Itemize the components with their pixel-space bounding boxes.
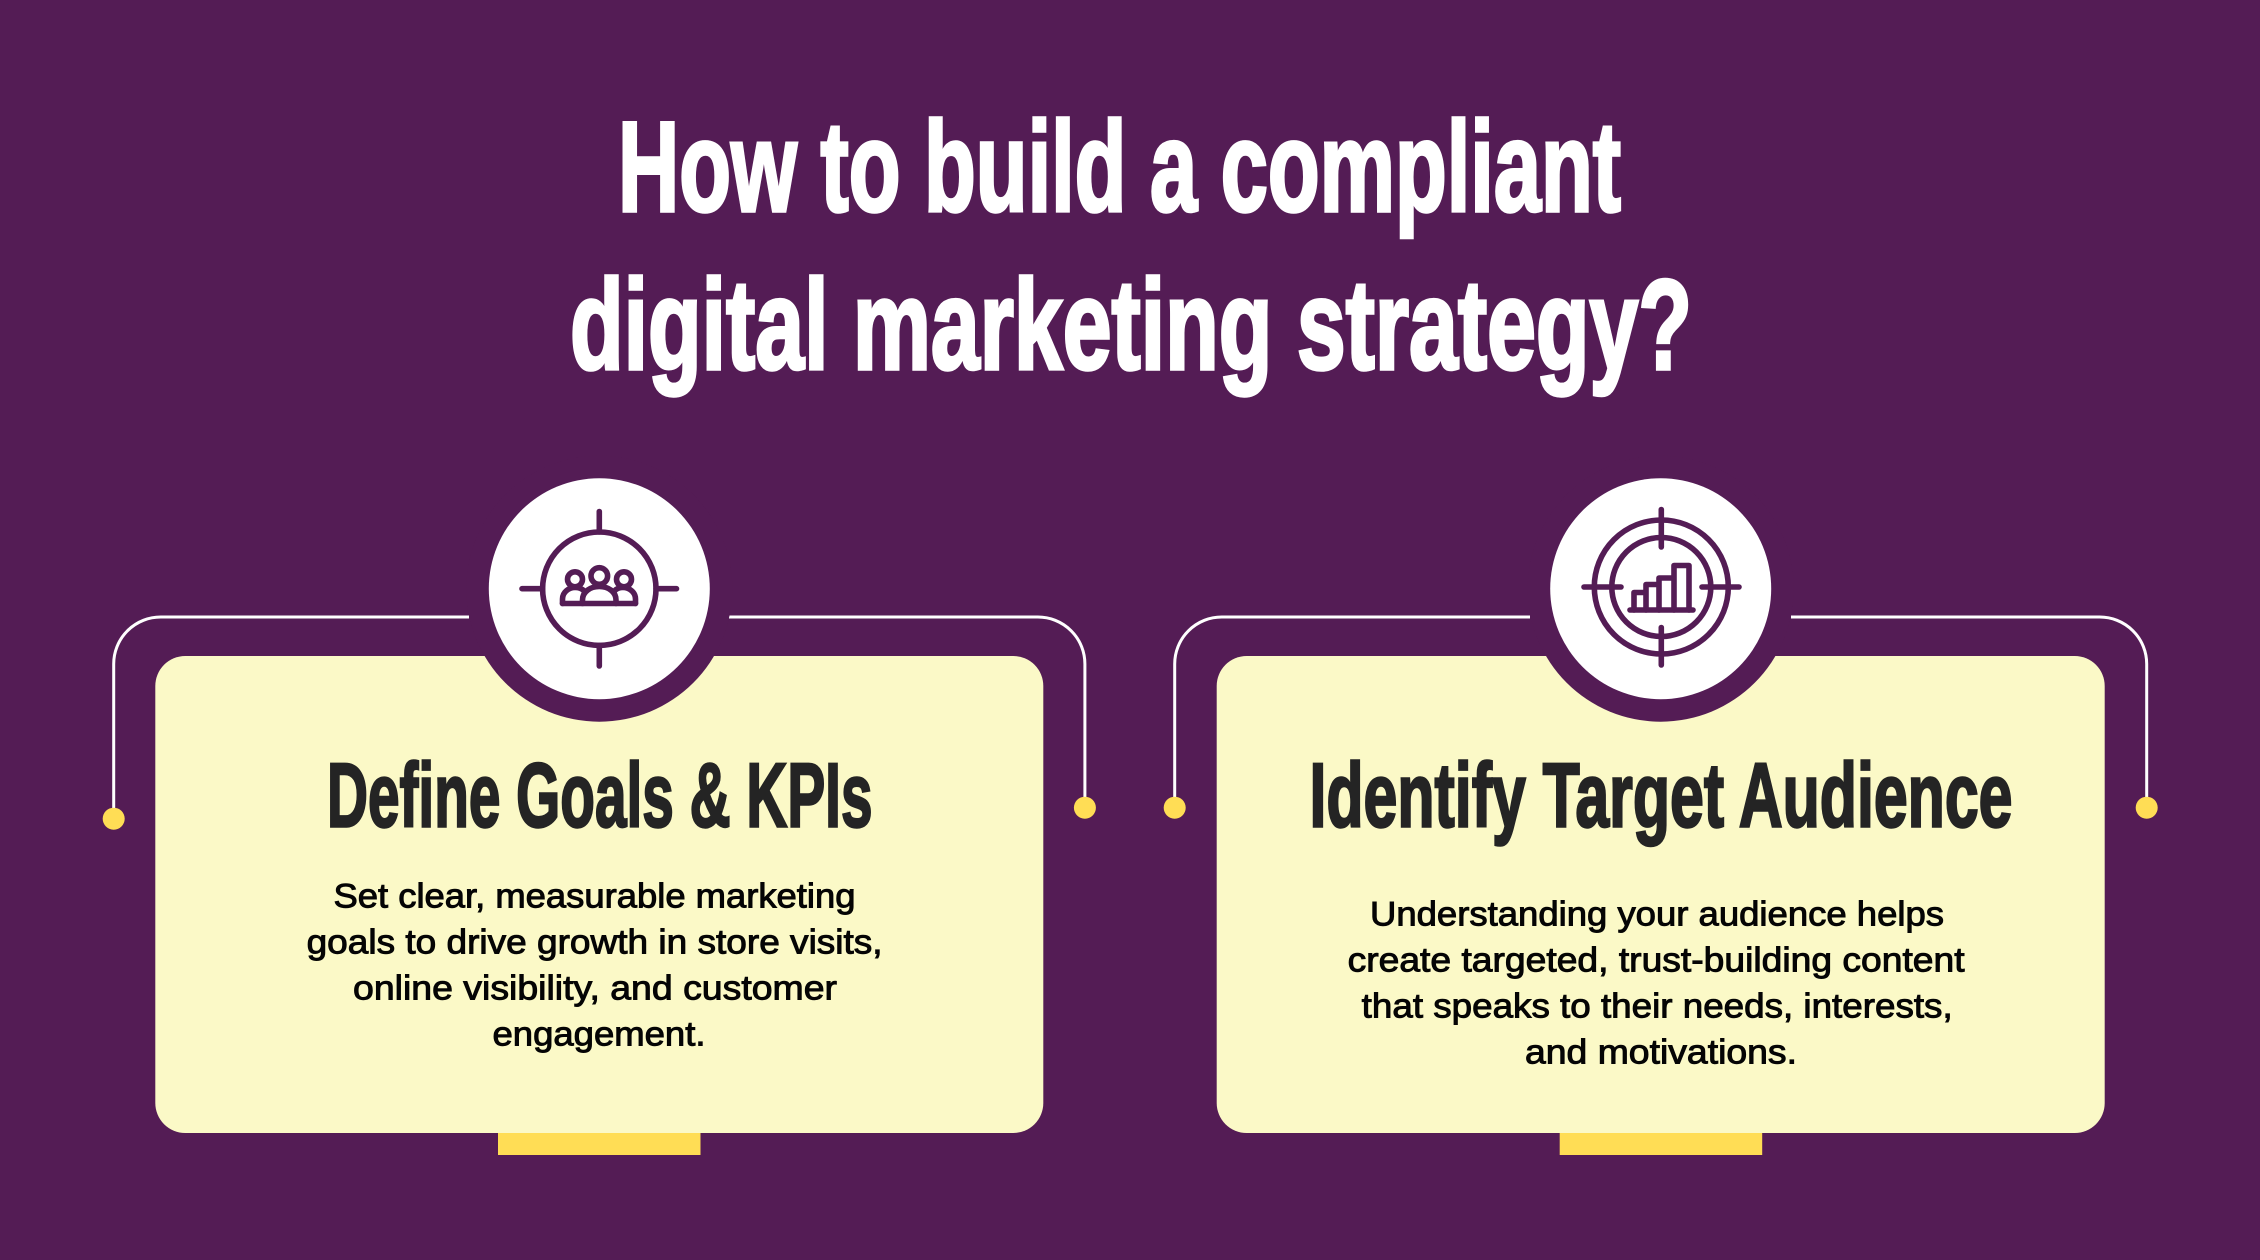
icon badge: target with bar chart [1528, 456, 1794, 722]
panel: identify target audience [1164, 456, 2158, 1155]
connector line right [1791, 617, 2158, 819]
body text: engagement. [492, 1016, 706, 1054]
body text [307, 878, 883, 1054]
body text: create targeted, trust-building content [1348, 942, 1965, 980]
yellow tab [498, 1130, 700, 1155]
panel: define goals and KPIs [103, 456, 1096, 1155]
title: How to build a compliant [618, 96, 1621, 239]
yellow tab [1560, 1130, 1762, 1155]
body text [1348, 896, 1965, 1072]
body text: and motivations. [1525, 1034, 1797, 1072]
connector line right [729, 617, 1096, 819]
title: digital marketing strategy? [570, 254, 1692, 397]
connector line left [103, 617, 469, 830]
body text: Understanding your audience helps [1370, 896, 1944, 934]
card background [155, 656, 1043, 1133]
connector line left [1164, 617, 1530, 819]
body text: Set clear, measurable marketing [334, 878, 856, 916]
body text: online visibility, and customer [353, 970, 837, 1008]
icon badge: audience target [466, 456, 732, 722]
title [570, 96, 1692, 397]
heading: Define Goals & KPIs [327, 746, 872, 846]
body text: that speaks to their needs, interests, [1362, 988, 1953, 1026]
body text: goals to drive growth in store visits, [307, 924, 883, 962]
card background [1217, 656, 2105, 1133]
